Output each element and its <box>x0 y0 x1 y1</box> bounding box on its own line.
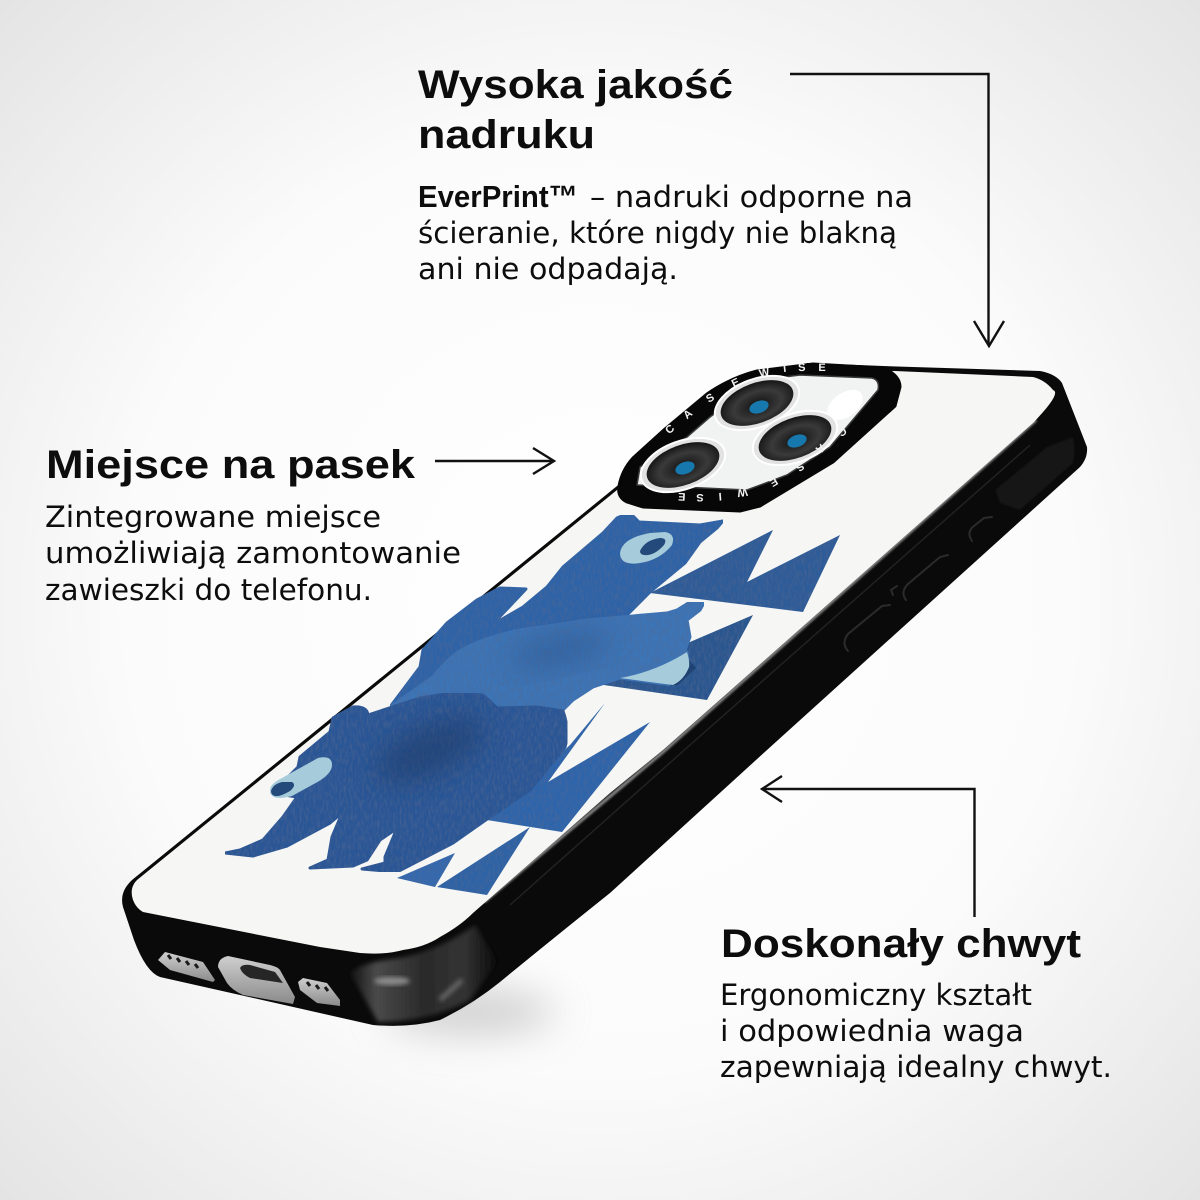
case body <box>122 363 1087 1026</box>
lens left <box>633 427 733 503</box>
camera ring lettering: C <box>835 424 849 439</box>
bear eye <box>620 532 673 564</box>
camera ring lettering: C <box>663 423 677 437</box>
lens top <box>707 365 807 441</box>
left speaker <box>158 952 215 982</box>
arrow: to print surface <box>790 74 1004 346</box>
camera ring lettering: I <box>718 490 722 502</box>
phone case <box>122 362 1087 1026</box>
artwork: middle bear <box>390 602 704 725</box>
arrow: to case side <box>762 776 974 917</box>
camera ring lettering: W <box>736 485 748 499</box>
artwork: bottom bear <box>225 693 567 872</box>
callout: print quality: ścieranie, które nigdy nie blakną <box>418 216 897 250</box>
callout: print quality: nadruku <box>418 113 595 157</box>
camera ring lettering: A <box>681 408 695 422</box>
right speaker <box>298 978 340 1006</box>
bear muzzle <box>270 757 332 798</box>
callout: grip <box>720 922 1112 1084</box>
callout: strap mount <box>45 443 461 607</box>
camera ring lettering: S <box>704 391 717 405</box>
callout: print quality <box>418 63 913 286</box>
heading: Doskonały chwyt <box>721 922 1081 966</box>
camera ring lettering: E <box>678 490 686 502</box>
side buttons <box>844 517 992 651</box>
lens glare <box>822 384 868 426</box>
camera ring lettering: E <box>818 362 826 374</box>
callout: grip: zapewniają idealny chwyt. <box>720 1050 1112 1084</box>
callout: strap mount: umożliwiają zamontowanie <box>45 536 461 570</box>
camera ring <box>619 364 900 511</box>
camera glass <box>637 375 878 490</box>
usb opening <box>218 956 295 1004</box>
dark fur patch <box>367 704 493 796</box>
camera ring lettering: W <box>758 366 771 380</box>
callout: print quality: ani nie odpadają. <box>418 252 678 286</box>
camera ring lettering: E <box>767 475 780 489</box>
bear snout <box>620 652 689 685</box>
body text: EverPrint™ <box>418 179 578 214</box>
lens right <box>745 400 845 476</box>
heading: Miejsce na pasek <box>46 443 416 487</box>
artwork: mountains <box>397 530 840 895</box>
rim highlight <box>484 420 1036 902</box>
body text: Ergonomiczny kształt <box>720 978 1032 1012</box>
charging port <box>158 952 340 1006</box>
callout: strap mount: zawieszki do telefonu. <box>45 573 372 607</box>
camera ring lettering: E <box>730 376 742 390</box>
camera bump <box>619 362 900 511</box>
camera ring lettering <box>663 362 849 503</box>
strap slot <box>995 437 1074 510</box>
phone shadow <box>385 990 555 1034</box>
artwork: top bear <box>390 515 723 720</box>
camera ring lettering: S <box>798 362 806 374</box>
arrow: to strap mount <box>435 448 554 474</box>
camera ring lettering: S <box>696 491 704 503</box>
callout: grip: i odpowiednia waga <box>720 1014 1024 1048</box>
screen <box>132 371 1055 954</box>
camera ring lettering: A <box>813 441 827 456</box>
callout: print quality: – nadruki odporne na <box>590 180 913 214</box>
camera ring lettering: S <box>793 459 806 473</box>
bottom corner highlight <box>350 925 497 1022</box>
bear snout shadow <box>670 660 696 686</box>
heading: Wysoka jakość <box>418 63 733 107</box>
body text: Zintegrowane miejsce <box>45 500 381 534</box>
camera ring lettering: I <box>783 363 787 375</box>
dark fur patch <box>508 626 612 674</box>
